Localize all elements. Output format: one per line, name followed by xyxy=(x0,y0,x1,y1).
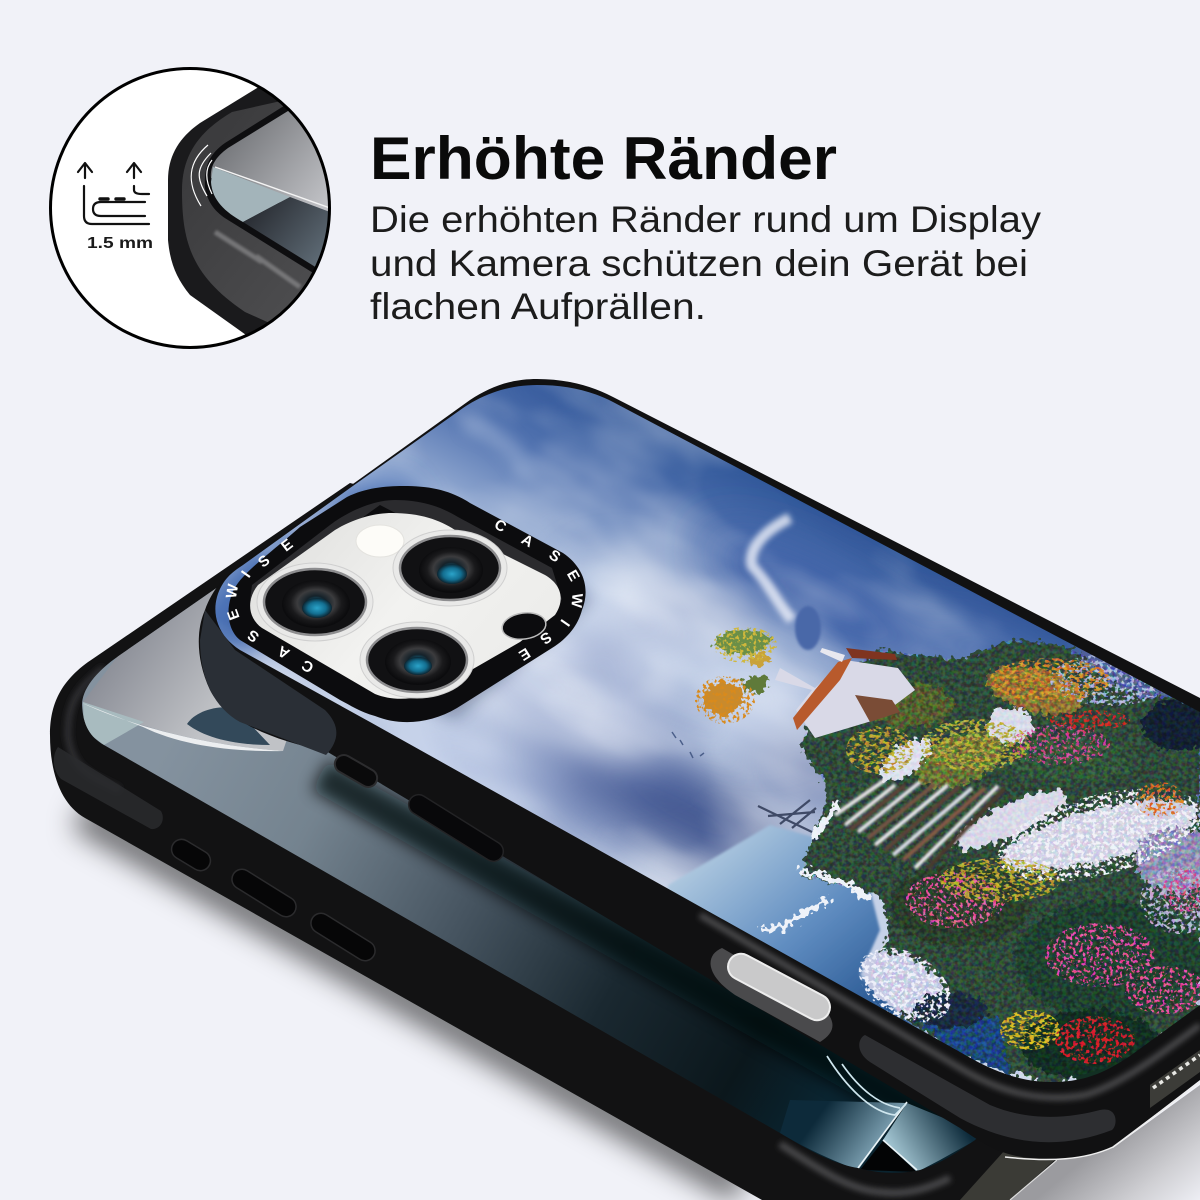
inset frame bevel xyxy=(182,102,312,322)
door xyxy=(855,695,900,722)
upper frame white dashes xyxy=(1153,1055,1200,1088)
CASEWISE lettering, right edge: W xyxy=(567,593,586,609)
purple rocks top right xyxy=(1072,631,1178,709)
inset screen light wedge xyxy=(211,167,290,222)
yellow-green grass speckle xyxy=(846,658,1110,1050)
lower phone frame xyxy=(50,483,1200,1200)
CASEWISE lettering, right edge: E xyxy=(516,644,533,664)
CASEWISE lettering, right edge: E xyxy=(563,567,583,584)
left blue band xyxy=(215,465,428,666)
inset reflection line xyxy=(215,167,330,208)
lower phone xyxy=(50,483,1058,1200)
upper phone frame xyxy=(199,379,1200,1159)
walls xyxy=(775,660,915,738)
wallpaper swirl arcs xyxy=(827,1056,906,1115)
chimney xyxy=(820,648,845,662)
lower frame carbon strip xyxy=(54,747,163,829)
CASEWISE lettering, left edge: I xyxy=(238,568,254,581)
turbulence cloud texture xyxy=(695,700,709,714)
upper phone xyxy=(157,379,1200,1160)
lower screen white arc xyxy=(82,703,283,751)
inset screen dark wedge xyxy=(243,197,328,267)
white speckle xyxy=(846,654,1200,1038)
olive grass xyxy=(866,683,954,727)
CASEWISE lettering, right edge: C xyxy=(491,516,509,536)
panel shade beneath upper phone xyxy=(320,775,960,1135)
inset inner bezel xyxy=(204,106,315,272)
diagram label: 1.5 mm xyxy=(87,235,153,252)
drop shadow under lower phone xyxy=(80,815,740,1188)
lower screen xyxy=(82,588,976,1173)
inset frame sheen xyxy=(215,232,300,287)
smoke xyxy=(795,606,821,650)
pink flower speckle xyxy=(905,725,1200,1014)
island base xyxy=(800,640,1200,1085)
upper cloud wisp xyxy=(465,425,530,475)
lower phone button: volume up xyxy=(228,865,300,921)
upper frame corner metallic band xyxy=(1150,1050,1200,1108)
lower flower bed xyxy=(890,865,1030,945)
drop shadow under upper phone corner xyxy=(1000,1085,1200,1200)
sea xyxy=(667,826,938,1039)
fence planks xyxy=(835,780,1005,868)
camera glass xyxy=(250,513,561,699)
wallpaper white lines xyxy=(858,1102,917,1170)
lens bottom xyxy=(360,622,474,698)
dark storm clouds xyxy=(538,544,928,886)
CASEWISE lettering, left edge: S xyxy=(255,552,273,571)
painting sky xyxy=(200,380,1200,1090)
body text xyxy=(370,199,1042,327)
island painting xyxy=(760,631,1200,1085)
upper frame bottom sheen xyxy=(700,915,1200,1098)
lower screen grey wedge xyxy=(84,588,286,751)
CASEWISE lettering, left edge: A xyxy=(275,642,293,662)
dock xyxy=(758,800,816,832)
lower frame bottom sheen xyxy=(780,1144,950,1193)
birds xyxy=(672,732,704,758)
inset impact arcs xyxy=(191,145,212,206)
CASEWISE lettering, right edge: S xyxy=(546,546,564,566)
house xyxy=(775,606,915,738)
foam xyxy=(760,800,870,930)
lens left xyxy=(257,563,373,641)
flash xyxy=(356,525,404,557)
heading: Erhöhte Ränder xyxy=(370,125,837,192)
CASEWISE lettering, left edge: W xyxy=(223,582,242,600)
lower rocks xyxy=(852,939,958,1031)
CASEWISE lettering, right edge: I xyxy=(557,616,573,629)
inset phone frame xyxy=(168,88,278,334)
body text: Die erhöhten Ränder rund um Display xyxy=(370,199,1042,240)
lower screen dark notch xyxy=(187,707,270,745)
main roof xyxy=(793,658,852,730)
painting on back of case xyxy=(157,380,1200,1090)
upper frame rim light xyxy=(1005,1082,1200,1160)
charging port metal xyxy=(723,949,835,1025)
trees xyxy=(702,630,770,715)
CASEWISE lettering, left edge: C xyxy=(299,656,317,676)
lower frame rail sheen xyxy=(68,668,120,790)
wallpaper blue panels xyxy=(780,1100,907,1170)
dark shore water xyxy=(880,985,1010,1075)
lower screen light wedge xyxy=(83,702,144,745)
wallpaper black triangle xyxy=(860,1141,917,1172)
camera ring xyxy=(228,486,586,722)
camera island xyxy=(223,486,590,722)
pale central clouds xyxy=(470,536,825,799)
white rocks xyxy=(986,707,1034,743)
camera ring inner bevel xyxy=(250,500,562,600)
magnified detail circle: raised edge xyxy=(50,68,330,348)
CASEWISE lettering, right edge: S xyxy=(537,628,555,648)
inset screen upper area xyxy=(211,111,330,220)
CASEWISE lettering, right edge xyxy=(491,516,586,664)
charging port bezel xyxy=(711,948,832,1042)
lower frame grey side xyxy=(960,1150,1057,1200)
lower phone button: volume down xyxy=(307,909,379,965)
red flower speckle xyxy=(1050,710,1184,1064)
ridge roof xyxy=(846,648,897,660)
lower phone button: action xyxy=(168,836,214,874)
upper frame carbon strip xyxy=(859,1035,1116,1142)
CASEWISE lettering, left edge xyxy=(223,536,317,676)
lens top right xyxy=(393,530,507,606)
lidar sensor xyxy=(500,610,548,642)
orange tree speckle xyxy=(695,627,777,724)
upper frame left blob, translucent xyxy=(200,610,336,755)
body text: flachen Aufprällen. xyxy=(370,286,706,327)
white cloud wisp xyxy=(751,518,792,620)
CASEWISE lettering, right edge: A xyxy=(518,531,536,551)
CASEWISE lettering, left edge: E xyxy=(278,536,296,555)
mute slot xyxy=(332,752,380,790)
side button xyxy=(405,791,507,865)
body text: und Kamera schützen dein Gerät bei xyxy=(370,243,1028,284)
raised edge diagram icon xyxy=(78,163,149,224)
CASEWISE lettering, left edge: E xyxy=(224,607,243,622)
CASEWISE lettering, left edge: S xyxy=(244,626,262,646)
island paint grain xyxy=(1000,850,1010,860)
camera ring soft shadow xyxy=(235,494,590,718)
